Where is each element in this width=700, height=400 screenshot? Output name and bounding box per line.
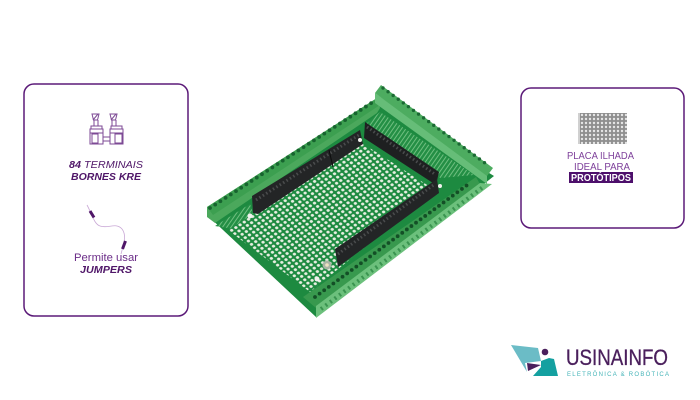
text: bornes KRE: BORNES KRE: [71, 171, 142, 183]
logo tagline: ELETRÔNICA & ROBÓTICA: [567, 371, 669, 378]
panel: left features card: [24, 84, 188, 316]
text: jumpers: JUMPERS: [80, 264, 132, 276]
text: protótipos highlight: PROTÓTIPOS: [571, 171, 631, 184]
icon: perforated board: [578, 113, 627, 144]
logo: UsinaInfo: [511, 345, 669, 378]
mounting holes and push button: [248, 138, 442, 282]
text: permite usar: Permite usar: [74, 252, 138, 264]
text: 84 terminais: 84 TERMINAIS: [69, 159, 143, 171]
top right terminal strip: [375, 85, 493, 184]
perforated area: [228, 143, 435, 292]
icon: KRE terminal blocks: [90, 114, 123, 144]
bottom terminal strip: [303, 177, 492, 318]
panel: right feature card: [521, 88, 684, 228]
header: upper right: [364, 122, 439, 185]
icon: jumper wire: [87, 205, 126, 254]
silkscreen area: [366, 112, 474, 178]
left terminal strip: [207, 98, 380, 223]
header: upper left: [252, 130, 363, 214]
text: placa ilhada: PLACA ILHADA: [567, 150, 634, 162]
board base: [207, 103, 494, 317]
header: lower right: [335, 179, 439, 267]
product photo: green prototyping board: [207, 85, 494, 318]
logo wordmark: USINAINFO: [566, 345, 668, 370]
logo icon: [511, 345, 558, 376]
text: ideal para: IDEAL PARA: [574, 161, 630, 173]
